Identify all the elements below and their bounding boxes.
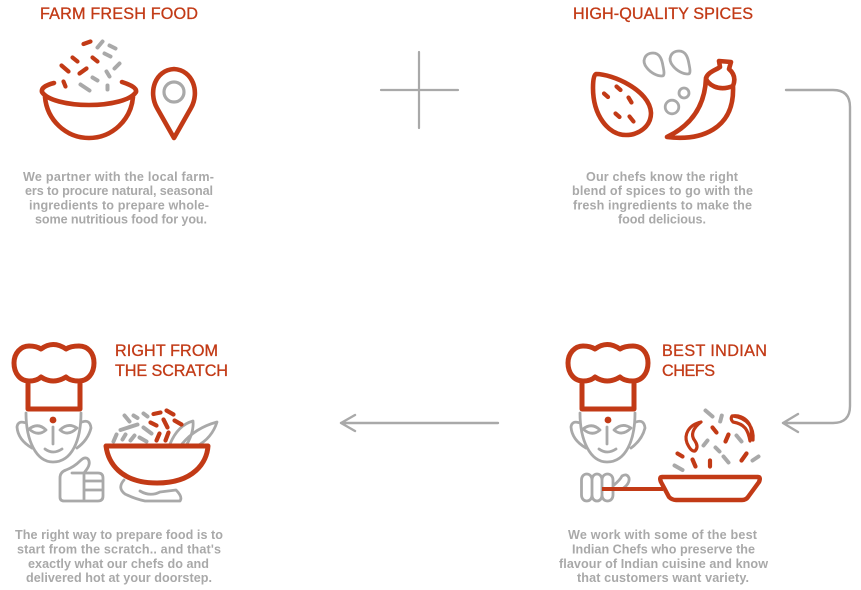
chef hat [14,344,94,409]
icon: chef with bowl [14,344,217,501]
icon: location pin [153,69,195,138]
text: spices description: fresh ingredients to make the [573,198,752,212]
text: spices description [572,170,753,226]
text: chefs description: flavour of Indian cuisine and know [559,557,768,571]
text: chefs description: We work with some of the best [568,528,758,542]
text: spices description: food delicious. [618,212,706,226]
heading: right from the scratch [115,342,228,380]
plus sign [381,52,458,128]
icon: chili [667,61,734,138]
panel: best indian chefs [559,342,768,585]
arrow: chefs to scratch [341,415,498,431]
text: farm fresh food description: ingredients to prepare whole- [29,198,209,212]
arrow: spices to chefs [783,90,850,432]
heading: high-quality spices: HIGH-QUALITY SPICES [573,5,753,23]
bowl [106,446,208,483]
heading: right from the scratch: RIGHT FROM [115,342,218,360]
chef face [17,413,91,462]
text: scratch description [15,528,223,585]
icon: almond [593,74,651,135]
heading: right from the scratch: THE SCRATCH [115,362,228,380]
heading: farm fresh food: FARM FRESH FOOD [40,5,198,23]
pan [660,477,760,500]
panel: right from the scratch [14,342,228,585]
text: chefs description: Indian Chefs who preserve the [572,542,755,556]
icon: seeds and bubbles [644,51,690,114]
panel: high-quality spices [572,5,753,226]
heading: best indian chefs [662,342,767,380]
tossed grains and chilies [674,410,758,470]
heading: best indian chefs: BEST INDIAN [662,342,767,360]
text: scratch description: exactly what our chefs do and [28,557,209,571]
text: scratch description: delivered hot at your doorstep. [26,571,212,585]
icon: bowl with grains [42,42,136,138]
text: scratch description: start from the scratch.. and that's [17,542,221,556]
chef face [571,413,645,462]
text: farm fresh food description: We partner with the local farm- [23,170,214,184]
text: spices description: blend of spices to go with the [572,184,753,198]
hand under bowl [121,480,181,501]
text: farm fresh food description: some nutritious food for you. [35,212,207,226]
heading: best indian chefs: CHEFS [662,362,715,380]
text: farm fresh food description: ers to procure natural, seasonal [25,184,213,198]
thumbs up hand [60,458,103,501]
text: spices description: Our chefs know the right [586,170,739,184]
text: chefs description: that customers want variety. [577,571,749,585]
panel: farm fresh food [23,5,214,226]
text: farm fresh food description [23,170,214,226]
icon: chef with pan [568,344,760,501]
chef hat [568,344,648,409]
text: chefs description [559,528,768,585]
text: scratch description: The right way to prepare food is to [15,528,223,542]
leaves and grains [170,421,217,446]
